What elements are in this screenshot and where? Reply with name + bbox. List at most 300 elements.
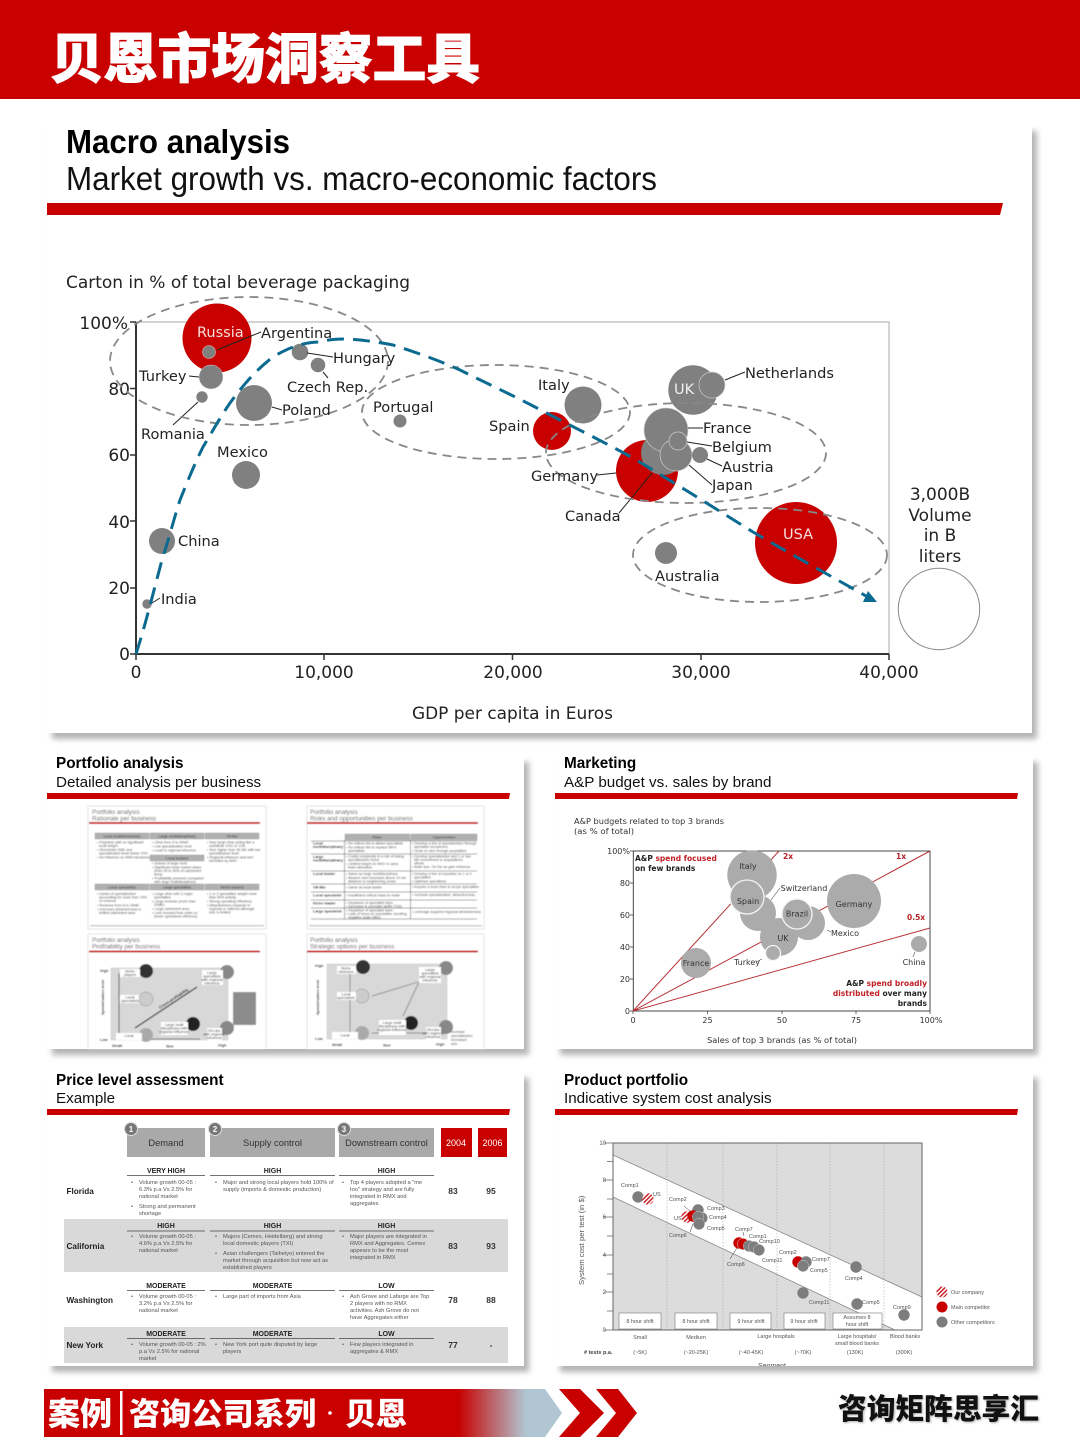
thumbnail: risks and opportunities: • Optimize operations bbox=[412, 880, 446, 884]
axes: 40,000 bbox=[859, 663, 919, 683]
point labels: Comp11 bbox=[762, 1258, 782, 1264]
point labels: Comp7 bbox=[735, 1227, 753, 1233]
point labels: Comp4 bbox=[845, 1276, 863, 1282]
volume legend: in B bbox=[924, 526, 956, 546]
thumbnail: strategic options: Specialisation level bbox=[316, 980, 320, 1015]
segment labels bbox=[584, 1334, 920, 1366]
thumbnail: risks and opportunities: Local bbox=[313, 842, 323, 846]
country labels: Czech Rep. bbox=[287, 379, 368, 396]
column headers: 2004 bbox=[446, 1138, 466, 1148]
row: New York: • bbox=[342, 1342, 344, 1348]
thumbnail: risks and opportunities: specialists bbox=[348, 849, 365, 853]
thumbnail: risks and opportunities: • Build size. On the as gain influence bbox=[412, 865, 470, 869]
country labels bbox=[138, 325, 834, 608]
thumbnail: rationale per business: (from 30 to 40% of catchment bbox=[154, 869, 201, 873]
cost scatter chart: 8 bbox=[603, 1178, 607, 1184]
row: California: HIGH bbox=[264, 1223, 281, 1230]
axes: 60 bbox=[108, 446, 130, 466]
thumbnail: rationale per business: • 1 or 2 specialties weight more bbox=[207, 892, 257, 896]
panel: macro analysis bbox=[47, 123, 1032, 733]
thumbnail: rationale per business: Local multidisciplinary bbox=[104, 834, 141, 838]
plot frame and ticks: 100% bbox=[607, 847, 630, 856]
thumbnail: rationale per business: specialization level bbox=[209, 852, 239, 856]
point labels: Comp5 bbox=[862, 1300, 880, 1306]
axes: 100% bbox=[79, 314, 128, 334]
row: Washington: • bbox=[131, 1294, 133, 1300]
thumbnail: rationale per business: 20ME) bbox=[154, 903, 165, 907]
thumbnail: rationale per business: • Subset of large multi bbox=[152, 862, 187, 866]
thumbnail: strategic options: Increase bbox=[451, 1030, 465, 1034]
thumbnail: rationale per business: Oil-like bbox=[226, 834, 238, 838]
row: New York bbox=[66, 1331, 493, 1362]
segment labels: (~20-25K) bbox=[684, 1350, 708, 1356]
segment labels: (300K) bbox=[896, 1350, 912, 1356]
row: New York: MODERATE bbox=[253, 1331, 293, 1338]
row: Florida: Strong and permanent bbox=[139, 1204, 196, 1210]
thumbnail: rationale per business: with large multidisciplinary bbox=[154, 880, 196, 884]
volume legend: 3,000B bbox=[910, 485, 970, 505]
row shading bbox=[64, 1219, 508, 1272]
thumbnail: profitability per business: influence bbox=[206, 1036, 222, 1040]
chevrons bbox=[559, 1389, 604, 1437]
brand labels: Spain bbox=[737, 897, 759, 906]
thumbnail: risks and opportunities: • No critical risk to attract specialists bbox=[346, 842, 403, 846]
thumbnail: risks and opportunities: • Develop specialization and 1 or two bbox=[412, 854, 471, 858]
thumbnail: strategic options: influence bbox=[425, 1035, 441, 1039]
row: Washington: Large part of imports from Asia bbox=[223, 1294, 302, 1300]
bubbles bbox=[142, 304, 980, 650]
thumbnail: profitability per business: High bbox=[218, 1044, 227, 1048]
country labels: China bbox=[178, 533, 220, 550]
row: New York: Volume growth 00-05 : 2% bbox=[139, 1342, 206, 1348]
row: New York: MODERATE bbox=[146, 1331, 186, 1338]
row: California: 4.6% p.a Vs 2.5% for bbox=[139, 1241, 193, 1247]
thumbnail: strategic options: regional influence bbox=[377, 1028, 407, 1032]
thumbnail: strategic options: specialisation bbox=[451, 1034, 473, 1038]
plot frame and ticks: 100% bbox=[920, 1016, 943, 1025]
thumbnail: rationale per business: area) bbox=[154, 872, 162, 876]
column headers: 3 bbox=[342, 1125, 347, 1134]
thumbnail: rationale per business: specialization level below 70% bbox=[99, 852, 148, 856]
row: California: • bbox=[215, 1251, 217, 1257]
bubble chart: A&P: (as % of total) bbox=[574, 827, 634, 836]
row: California bbox=[66, 1223, 496, 1271]
row: Florida bbox=[66, 1168, 496, 1217]
callout: focused: on few brands bbox=[635, 864, 696, 873]
column headers bbox=[124, 1122, 507, 1157]
thumbnail: rationale per business: • Very large clinic acting like a bbox=[207, 840, 254, 844]
callout: distributed: A&P spend broadly bbox=[846, 979, 927, 988]
thumbnail: rationale per business: • Size higher than 30 ME with low bbox=[207, 848, 261, 852]
callout: distributed: brands bbox=[898, 999, 928, 1008]
thumbnail: rationale per business: • Strong operating efficiency bbox=[207, 900, 252, 904]
thumbnail: rationale per business: Rationale per business bbox=[92, 816, 156, 822]
point labels: US bbox=[653, 1192, 661, 1198]
product heading: Product portfolio bbox=[564, 1072, 688, 1089]
thumbnail: rationale per business: • Local to regional influence bbox=[152, 848, 196, 852]
thumbnail: risks and opportunities: • Departure of specialist stars bbox=[346, 908, 393, 912]
price heading: Price level assessment bbox=[56, 1072, 224, 1089]
shift boxes bbox=[619, 1313, 882, 1329]
axes: 20 bbox=[108, 579, 130, 599]
thumbnail: rationale per business: specialties bbox=[154, 896, 171, 900]
row: Washington: • bbox=[342, 1294, 344, 1300]
trend curve bbox=[136, 339, 877, 654]
point labels: Comp3 bbox=[707, 1206, 725, 1212]
thumbnail: risks and opportunities: • Departure of specialist stars bbox=[346, 901, 393, 905]
cost scatter chart: 6 bbox=[603, 1215, 607, 1221]
product heading: Indicative system cost analysis bbox=[564, 1090, 772, 1107]
thumbnail: risks and opportunities: • Limited insight on MKH to carry bbox=[346, 862, 398, 866]
axes: 30,000 bbox=[671, 663, 731, 683]
row: California: integrated in RMX bbox=[350, 1255, 396, 1261]
row: California: Volume growth 00-05 : bbox=[139, 1234, 196, 1240]
footer text bbox=[48, 1389, 407, 1435]
callout: distributed bbox=[833, 979, 928, 1008]
point labels: Comp9 bbox=[893, 1305, 911, 1311]
thumbnail: rationale per business: regional or national although bbox=[209, 907, 254, 911]
thumbnail: strategic options: influence bbox=[422, 978, 438, 982]
thumbnail: risks and opportunities: Niche leader bbox=[313, 902, 336, 906]
thumbnail: risks and opportunities: • Develop a line of expertise on 1 or 2 bbox=[412, 872, 472, 876]
row: California: market through acquisition but now act as bbox=[223, 1258, 328, 1264]
thumbnail: risks and opportunities: • No critical risk to replace MKH bbox=[346, 846, 397, 850]
portfolio heading: Detailed analysis per business bbox=[56, 774, 262, 791]
data points bbox=[632, 1191, 910, 1321]
row: Florida: VERY HIGH bbox=[147, 1168, 185, 1175]
segment labels: (~40-45K) bbox=[739, 1350, 763, 1356]
volume legend: Volume bbox=[908, 506, 972, 526]
thumbnail: risks and opportunities: • Costly complexity in a risk of losing bbox=[346, 854, 404, 858]
country labels: Italy bbox=[538, 377, 570, 394]
thumbnail: profitability per business: Profitability per business bbox=[92, 944, 160, 950]
thumbnail: strategic options bbox=[307, 934, 484, 1049]
thumbnail: rationale per business: • Large clinic with 3 major bbox=[152, 892, 194, 896]
brand labels: Turkey bbox=[733, 958, 760, 967]
brand labels: Mexico bbox=[831, 929, 859, 938]
y axis title: Carton in % of total beverage packaging bbox=[66, 273, 410, 293]
row: Washington: 2 players with no RMX bbox=[350, 1301, 407, 1307]
thumbnail: strategic options: specialists bbox=[421, 972, 439, 976]
row: New York: New York bbox=[66, 1341, 104, 1350]
plot frame and ticks: 0 bbox=[625, 1007, 630, 1016]
point labels: Comp6 bbox=[669, 1233, 687, 1239]
thumbnail: rationale per business: • Large revenue (more than bbox=[152, 900, 196, 904]
thumbnail: profitability per business: Small bbox=[112, 1044, 122, 1048]
row: New York: - bbox=[490, 1340, 493, 1350]
marketing heading: A&P budget vs. sales by brand bbox=[564, 774, 771, 791]
thumbnail: risks and opportunities: Large bbox=[313, 855, 323, 859]
macro heading bbox=[66, 123, 657, 197]
brand bubbles bbox=[681, 850, 927, 978]
point labels: Comp4 bbox=[709, 1215, 727, 1221]
price heading bbox=[56, 1072, 224, 1107]
point labels: Comp2 bbox=[779, 1250, 797, 1256]
thumbnail: profitability per business: with regional bbox=[201, 978, 223, 982]
country labels: Romania bbox=[141, 426, 205, 443]
thumbnail: strategic options: Niche bbox=[341, 966, 351, 970]
thumbnail: profitability per business: Low bbox=[100, 1038, 108, 1042]
footer text: 贝恩 bbox=[345, 1389, 407, 1434]
thumbnail: rationale per business: Large multidisciplinary bbox=[158, 834, 196, 838]
thumbnail: rationale per business: • Low specialization level bbox=[152, 844, 192, 848]
thumbnail: rationale per business: • Improved attractiveness in bbox=[97, 908, 141, 912]
thumbnail: risks and opportunities bbox=[307, 806, 484, 929]
row: Florida: aggregates bbox=[350, 1201, 379, 1207]
country labels: Belgium bbox=[712, 439, 772, 456]
row: Washington: MODERATE bbox=[146, 1283, 186, 1290]
brand labels: Switzerland bbox=[781, 884, 827, 893]
row: California: national market bbox=[139, 1248, 178, 1254]
thumbnail: risks and opportunities: • Beware new increases above 10 km bbox=[346, 876, 406, 880]
row: New York: 77 bbox=[448, 1340, 458, 1350]
segment labels: (130K) bbox=[847, 1350, 863, 1356]
row: Florida: shortage bbox=[139, 1211, 161, 1217]
thumbnail: strategic options: Increased bbox=[451, 1038, 467, 1042]
cost scatter chart: 0 bbox=[603, 1328, 607, 1334]
column headers: 1 bbox=[129, 1125, 134, 1134]
point labels bbox=[621, 1183, 911, 1311]
thumbnail: strategic options: Strategic options per business bbox=[310, 944, 394, 950]
bubble chart: A&P bbox=[574, 817, 943, 1045]
plot frame and ticks bbox=[607, 847, 943, 1025]
leader lines bbox=[152, 332, 745, 603]
footer banner bbox=[44, 1386, 1039, 1437]
segment labels: small blood banks bbox=[835, 1341, 879, 1347]
thumbnail: rationale per business: • Less focused than clubs so bbox=[152, 911, 198, 915]
macro heading: Market growth vs. macro-economic factors bbox=[66, 160, 657, 197]
thumbnail: rationale per business: • Attractiveness expands to bbox=[207, 904, 250, 908]
row: Washington: Volume growth 00-05 : bbox=[139, 1294, 196, 1300]
thumbnail: risks and opportunities: • Lack of focus on specialties resulting bbox=[346, 912, 407, 916]
thumbnail: rationale per business: limited catchment area bbox=[99, 911, 135, 915]
price table bbox=[64, 1122, 508, 1363]
row: Florida: 95 bbox=[486, 1186, 496, 1196]
legend: Our company bbox=[951, 1290, 984, 1296]
plot frame and ticks: 75 bbox=[851, 1016, 861, 1025]
country labels: USA bbox=[783, 527, 813, 543]
country labels: UK bbox=[674, 382, 695, 398]
row: Florida: 83 bbox=[448, 1186, 458, 1196]
thumbnail: strategic options: Oil-Like bbox=[427, 1028, 439, 1032]
cost scatter chart: 10 bbox=[599, 1141, 607, 1147]
top title band: 贝恩市场洞察工具 bbox=[50, 15, 480, 94]
row: Florida: • bbox=[131, 1204, 133, 1210]
ratio labels bbox=[783, 852, 925, 922]
bubble chart: A&P: A&P budgets related to top 3 brands bbox=[574, 817, 724, 826]
row: Florida: • bbox=[342, 1180, 344, 1186]
country labels: Mexico bbox=[217, 444, 268, 461]
portfolio heading bbox=[56, 755, 262, 791]
thumbnail: strategic options: Local bbox=[341, 992, 351, 996]
plot frame and ticks: 20 bbox=[620, 975, 630, 984]
row: California: Asian challengers (Taiheiyo) entered the bbox=[223, 1251, 324, 1257]
point labels: Comp1 bbox=[749, 1234, 767, 1240]
segment labels: Large hospitals bbox=[757, 1334, 795, 1340]
row: Florida: HIGH bbox=[264, 1168, 281, 1175]
country labels: Poland bbox=[282, 402, 331, 419]
thumbnail: risks and opportunities: Portfolio analysis bbox=[310, 809, 358, 816]
row: Washington: MODERATE bbox=[253, 1283, 293, 1290]
thumbnail: profitability per business: Local bbox=[124, 1034, 134, 1038]
row: New York: New York port quite disputed by large bbox=[223, 1342, 317, 1348]
row: Florida: Top 4 players adopted a "me bbox=[350, 1180, 422, 1186]
thumbnail: risks and opportunities: • Insufficient critical mass to retain bbox=[346, 894, 400, 898]
thumbnail: rationale per business: • Regional influence and well bbox=[207, 856, 253, 860]
x axis title: GDP per capita in Euros bbox=[412, 704, 613, 724]
point labels: Comp5 bbox=[707, 1226, 725, 1232]
row: Washington: activities. Ash Grove do not bbox=[350, 1308, 419, 1314]
bubble chart: market growth bbox=[66, 273, 980, 724]
thumbnail: profitability per business: Portfolio analysis bbox=[92, 937, 140, 944]
country labels: Japan bbox=[711, 477, 753, 494]
row: Florida: HIGH bbox=[378, 1168, 395, 1175]
thumbnail: rationale per business: substitute CHU or CHL bbox=[209, 844, 246, 848]
row: Florida: national market bbox=[139, 1194, 178, 1200]
segment labels: Blood banks bbox=[890, 1334, 920, 1340]
row: Washington: national market bbox=[139, 1308, 178, 1314]
dashed clusters bbox=[110, 297, 887, 602]
thumbnail: profitability per business: with regional bbox=[203, 1032, 225, 1036]
thumbnail: rationale per business: • Directories SME and bbox=[97, 848, 132, 852]
country labels: Turkey bbox=[138, 368, 187, 385]
thumbnail: strategic options: Portfolio analysis bbox=[310, 937, 358, 944]
country labels: India bbox=[161, 591, 197, 608]
row: California: HIGH bbox=[378, 1223, 395, 1230]
segment labels: Large hospitals/ bbox=[838, 1334, 877, 1340]
thumbnail: risks and opportunities: specialization focus bbox=[348, 858, 379, 862]
price heading: Example bbox=[56, 1090, 115, 1107]
thumbnail: risks and opportunities: Local leader bbox=[313, 872, 336, 876]
point labels: Comp11 bbox=[809, 1300, 829, 1306]
callout: distributed: distributed over many bbox=[833, 989, 927, 998]
callout: focused: A&P spend focused bbox=[635, 854, 717, 863]
row: California: local domestic players (TXI) bbox=[223, 1241, 293, 1247]
row: California: California bbox=[66, 1242, 105, 1251]
thumbnail: rationale per business: • Polyclinic with no significant bbox=[97, 840, 144, 844]
row: California: 83 bbox=[448, 1241, 458, 1251]
thumbnail: rationale per business: Local leaders bbox=[166, 856, 188, 860]
row: Washington: • bbox=[215, 1294, 217, 1300]
cost scatter chart: 9 hour shift bbox=[737, 1319, 765, 1325]
brand labels: Italy bbox=[739, 862, 757, 871]
thumbnail: profitability per business: Large multi bbox=[165, 1023, 184, 1027]
thumbnail: rationale per business: identified by ARH bbox=[209, 859, 237, 863]
legend: Other competitors bbox=[951, 1320, 995, 1326]
thumbnail: profitability per business: Specialisation level bbox=[101, 980, 105, 1015]
thumbnail: profitability per business: High bbox=[100, 969, 109, 973]
thumbnail: risks and opportunities: Opportunities bbox=[433, 836, 455, 840]
thumbnail: risks and opportunities: Local specialist bbox=[313, 894, 342, 898]
thumbnail: risks and opportunities: • Develop a line of specialization through bbox=[412, 842, 477, 846]
column headers: 2006 bbox=[482, 1138, 503, 1148]
ratio labels: 1x bbox=[896, 852, 906, 861]
segment labels: Small bbox=[633, 1335, 647, 1341]
row: New York: • bbox=[215, 1342, 217, 1348]
marketing heading bbox=[564, 755, 771, 791]
thumbnail: risks and opportunities: efforts bbox=[414, 862, 424, 866]
panel: portfolio analysis bbox=[47, 755, 524, 1049]
row: Washington: 78 bbox=[448, 1295, 458, 1305]
thumbnail: rationale per business: size is limited bbox=[209, 910, 230, 914]
cost scatter chart: 8 hour shift bbox=[682, 1319, 710, 1325]
panel: marketing bbox=[555, 755, 1033, 1049]
plot frame and ticks: 0 bbox=[630, 1016, 636, 1025]
macro heading: Macro analysis bbox=[66, 123, 290, 160]
thumbnail: profitability per business: Niche bbox=[125, 970, 135, 974]
thumbnail: profitability per business: disciplinary with bbox=[161, 1026, 187, 1030]
segment labels: # tests p.a. bbox=[584, 1350, 613, 1356]
row: California: RMX and Aggregates. Cemex bbox=[350, 1241, 425, 1247]
footer brand: 咨询矩阵思享汇 bbox=[838, 1386, 1039, 1428]
thumbnail: rationale per business: Large specialists bbox=[163, 886, 191, 890]
brand labels: Brazil bbox=[786, 910, 808, 918]
thumbnail: strategic options: with regional bbox=[419, 975, 441, 979]
thumbnail: strategic options: clinicians bbox=[338, 970, 354, 974]
cost scatter chart bbox=[577, 1141, 995, 1370]
thumbnail: risks and opportunities: • Leverage acquired regional attractiveness bbox=[412, 910, 481, 914]
column headers: Downstream control bbox=[345, 1138, 428, 1148]
row: Florida: Major and strong local players hold 100% of bbox=[223, 1180, 334, 1186]
ratio labels: 2x bbox=[783, 852, 793, 861]
thumbnail: strategic options: Large bbox=[425, 968, 435, 972]
row: California: 93 bbox=[486, 1241, 496, 1251]
row: Florida: • bbox=[215, 1180, 217, 1186]
row: California: established players bbox=[223, 1265, 272, 1271]
segment labels: (~5K) bbox=[633, 1350, 647, 1356]
country labels: Germany bbox=[531, 468, 598, 485]
axes: 40 bbox=[108, 513, 130, 533]
segment labels: Medium bbox=[686, 1335, 706, 1341]
thumbnail: strategic options: Low bbox=[315, 1037, 323, 1041]
row: Washington: have Aggregates either bbox=[350, 1315, 409, 1321]
row: Washington: 3.2% p.a Vs 2.5% for bbox=[139, 1301, 193, 1307]
thumbnail: strategic options: with regional bbox=[422, 1032, 444, 1036]
cost scatter chart: 9 hour shift bbox=[790, 1319, 818, 1325]
volume legend bbox=[908, 485, 972, 567]
row: New York: Few players integrated in bbox=[350, 1342, 414, 1348]
point labels: Comp10 bbox=[759, 1239, 780, 1245]
axes: 0 bbox=[131, 663, 141, 683]
row: Washington: LOW bbox=[378, 1283, 395, 1290]
thumbnail: rationale per business: • Revenue from 8 to 20ME bbox=[97, 904, 140, 908]
row: Florida: supply (imports & domestic production) bbox=[223, 1187, 321, 1193]
brand labels: France bbox=[683, 959, 709, 968]
row: Washington: Ash Grove and Lafarge are Top bbox=[350, 1294, 429, 1300]
portfolio heading: Portfolio analysis bbox=[56, 755, 184, 772]
thumbnail: risks and opportunities: Risks and opportunities per business bbox=[310, 816, 413, 822]
thumbnail: risks and opportunities: team allocation bbox=[348, 866, 372, 870]
thumbnail: profitability per business: specialists bbox=[121, 999, 139, 1003]
row: New York: • bbox=[131, 1342, 133, 1348]
thumbnail: strategic options: size bbox=[451, 1042, 457, 1046]
marketing heading: Marketing bbox=[564, 755, 636, 772]
thumbnail: risks and opportunities: Risks bbox=[372, 836, 382, 840]
country labels: Portugal bbox=[373, 399, 433, 416]
row: Florida: too" strategy and are fully bbox=[350, 1187, 414, 1193]
point labels: Comp1 bbox=[621, 1183, 639, 1189]
country labels: Argentina bbox=[261, 325, 332, 342]
legend bbox=[936, 1286, 995, 1328]
thumbnail: rationale per business: than 90% activity bbox=[209, 896, 236, 900]
thumbnail: strategic options: High bbox=[315, 964, 324, 968]
plot frame and ticks: 25 bbox=[702, 1016, 713, 1025]
thumbnail: rationale per business: • Clinic from 8 to 30ME bbox=[152, 840, 189, 844]
thumbnail: profitability per business: regional influence bbox=[159, 1030, 189, 1034]
row: California: • bbox=[131, 1234, 133, 1240]
thumbnail: rationale per business: • Significant local market share bbox=[152, 866, 201, 870]
thumbnail: profitability per business: players bbox=[124, 973, 136, 977]
